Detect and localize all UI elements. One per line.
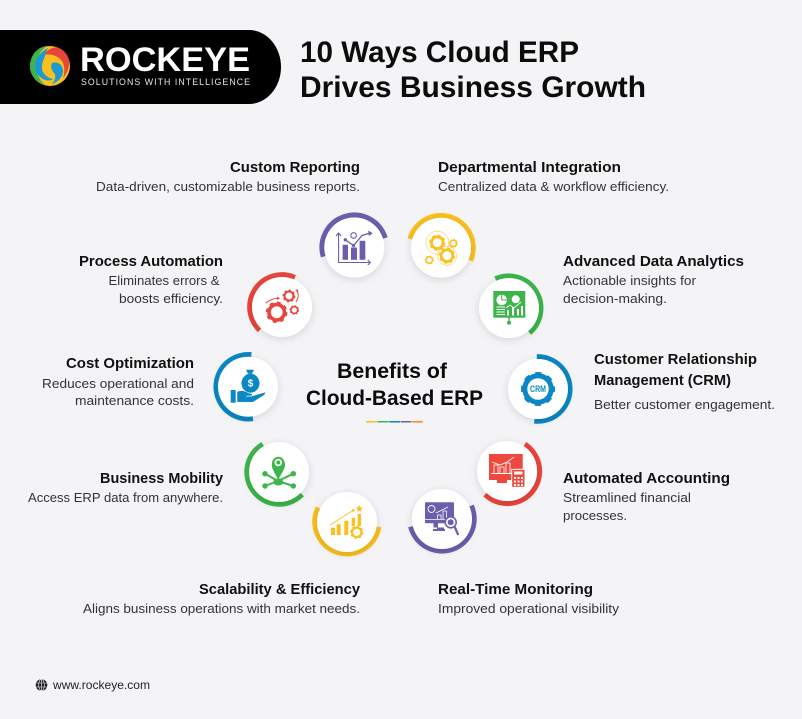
text block: Departmental Integration: Centralized data & workflow efficiency.: [438, 180, 669, 194]
text block: Scalability & Efficiency: Aligns business operations with market needs.: [83, 602, 360, 616]
text block: Advanced Data Analytics: Advanced Data Analytics: [563, 253, 744, 270]
icon: business mobility badge: [247, 442, 309, 504]
title: [300, 36, 646, 104]
text block: Real-Time Monitoring: [438, 581, 620, 616]
text block: Automated Accounting: Streamlined financial: [563, 491, 691, 505]
text block: Customer Relationship Management: Management (CRM): [594, 372, 731, 389]
icon: automated accounting badge: [477, 441, 540, 504]
icon: real-time monitoring badge: [411, 489, 474, 551]
text block: Scalability & Efficiency: [83, 581, 361, 616]
logo tagline: SOLUTIONS WITH INTELLIGENCE: [81, 77, 250, 87]
text block: Process Automation: [79, 253, 223, 306]
text block: Cost Optimization: [42, 355, 194, 408]
text block: Process Automation: boosts efficiency.: [119, 292, 223, 306]
website url: www.rockeye.com: [52, 678, 150, 692]
text block: Process Automation: Eliminates errors &: [108, 274, 220, 288]
text block: Process Automation: Process Automation: [79, 253, 223, 270]
text block: Advanced Data Analytics: [563, 253, 744, 306]
text block: Automated Accounting: Automated Accounting: [563, 470, 730, 487]
text block: Scalability & Efficiency: Scalability & Efficiency: [199, 581, 361, 598]
text block: Custom Reporting: Custom Reporting: [230, 159, 360, 176]
text block: Customer Relationship Management: Customer Relationship: [594, 351, 757, 368]
text block: Advanced Data Analytics: Actionable insights for: [563, 274, 696, 288]
center heading: [306, 360, 483, 422]
text block: Cost Optimization: Cost Optimization: [66, 355, 194, 372]
text block: Customer Relationship Management: [594, 351, 775, 412]
icon: departmental integration badge: [410, 215, 473, 278]
logo wordmark: ROCKEYE: [80, 41, 250, 79]
text block: Automated Accounting: [563, 470, 730, 523]
icon: cost optimization badge: $: [248, 379, 254, 390]
text block: Business Mobility: Access ERP data from anywhere.: [28, 491, 223, 505]
icon: process automation badge: [250, 275, 312, 337]
center heading: Benefits of: [337, 360, 448, 383]
text block: Cost Optimization: Reduces operational and: [42, 377, 194, 391]
icon: rockeye swirl logo: [30, 46, 70, 86]
text block: Customer Relationship Management: Better customer engagement.: [594, 398, 775, 412]
text block: Business Mobility: Business Mobility: [100, 470, 224, 487]
text block: Cost Optimization: maintenance costs.: [75, 394, 194, 408]
icon: CRM gear badge: CRM: [530, 384, 546, 394]
text block: Advanced Data Analytics: decision-making.: [563, 292, 667, 306]
icon: globe: [36, 679, 47, 691]
footer website: [36, 678, 150, 692]
icon: CRM gear badge: [508, 357, 570, 421]
text block: Departmental Integration: Departmental Integration: [438, 159, 621, 176]
icon: cost optimization badge: [216, 354, 278, 419]
center heading: Cloud-Based ERP: [306, 387, 483, 410]
text block: Custom Reporting: Data-driven, customizable business reports.: [96, 180, 360, 194]
center colour divider: [366, 421, 423, 422]
icon: custom reporting badge: [322, 215, 385, 278]
title: 10 Ways Cloud ERP: [300, 36, 579, 69]
text block: Custom Reporting: [96, 159, 360, 194]
text block: Departmental Integration: [438, 159, 669, 194]
text block: Business Mobility: [28, 470, 224, 505]
logo banner: [0, 30, 281, 104]
text block: Real-Time Monitoring: Improved operational visibility: [438, 602, 620, 616]
text block: Real-Time Monitoring: Real-Time Monitoring: [438, 581, 593, 598]
title: Drives Business Growth: [300, 71, 646, 104]
icon: advanced data analytics badge: [479, 276, 541, 338]
icon: scalability and efficiency badge: [315, 492, 379, 554]
text block: Automated Accounting: processes.: [563, 509, 627, 523]
